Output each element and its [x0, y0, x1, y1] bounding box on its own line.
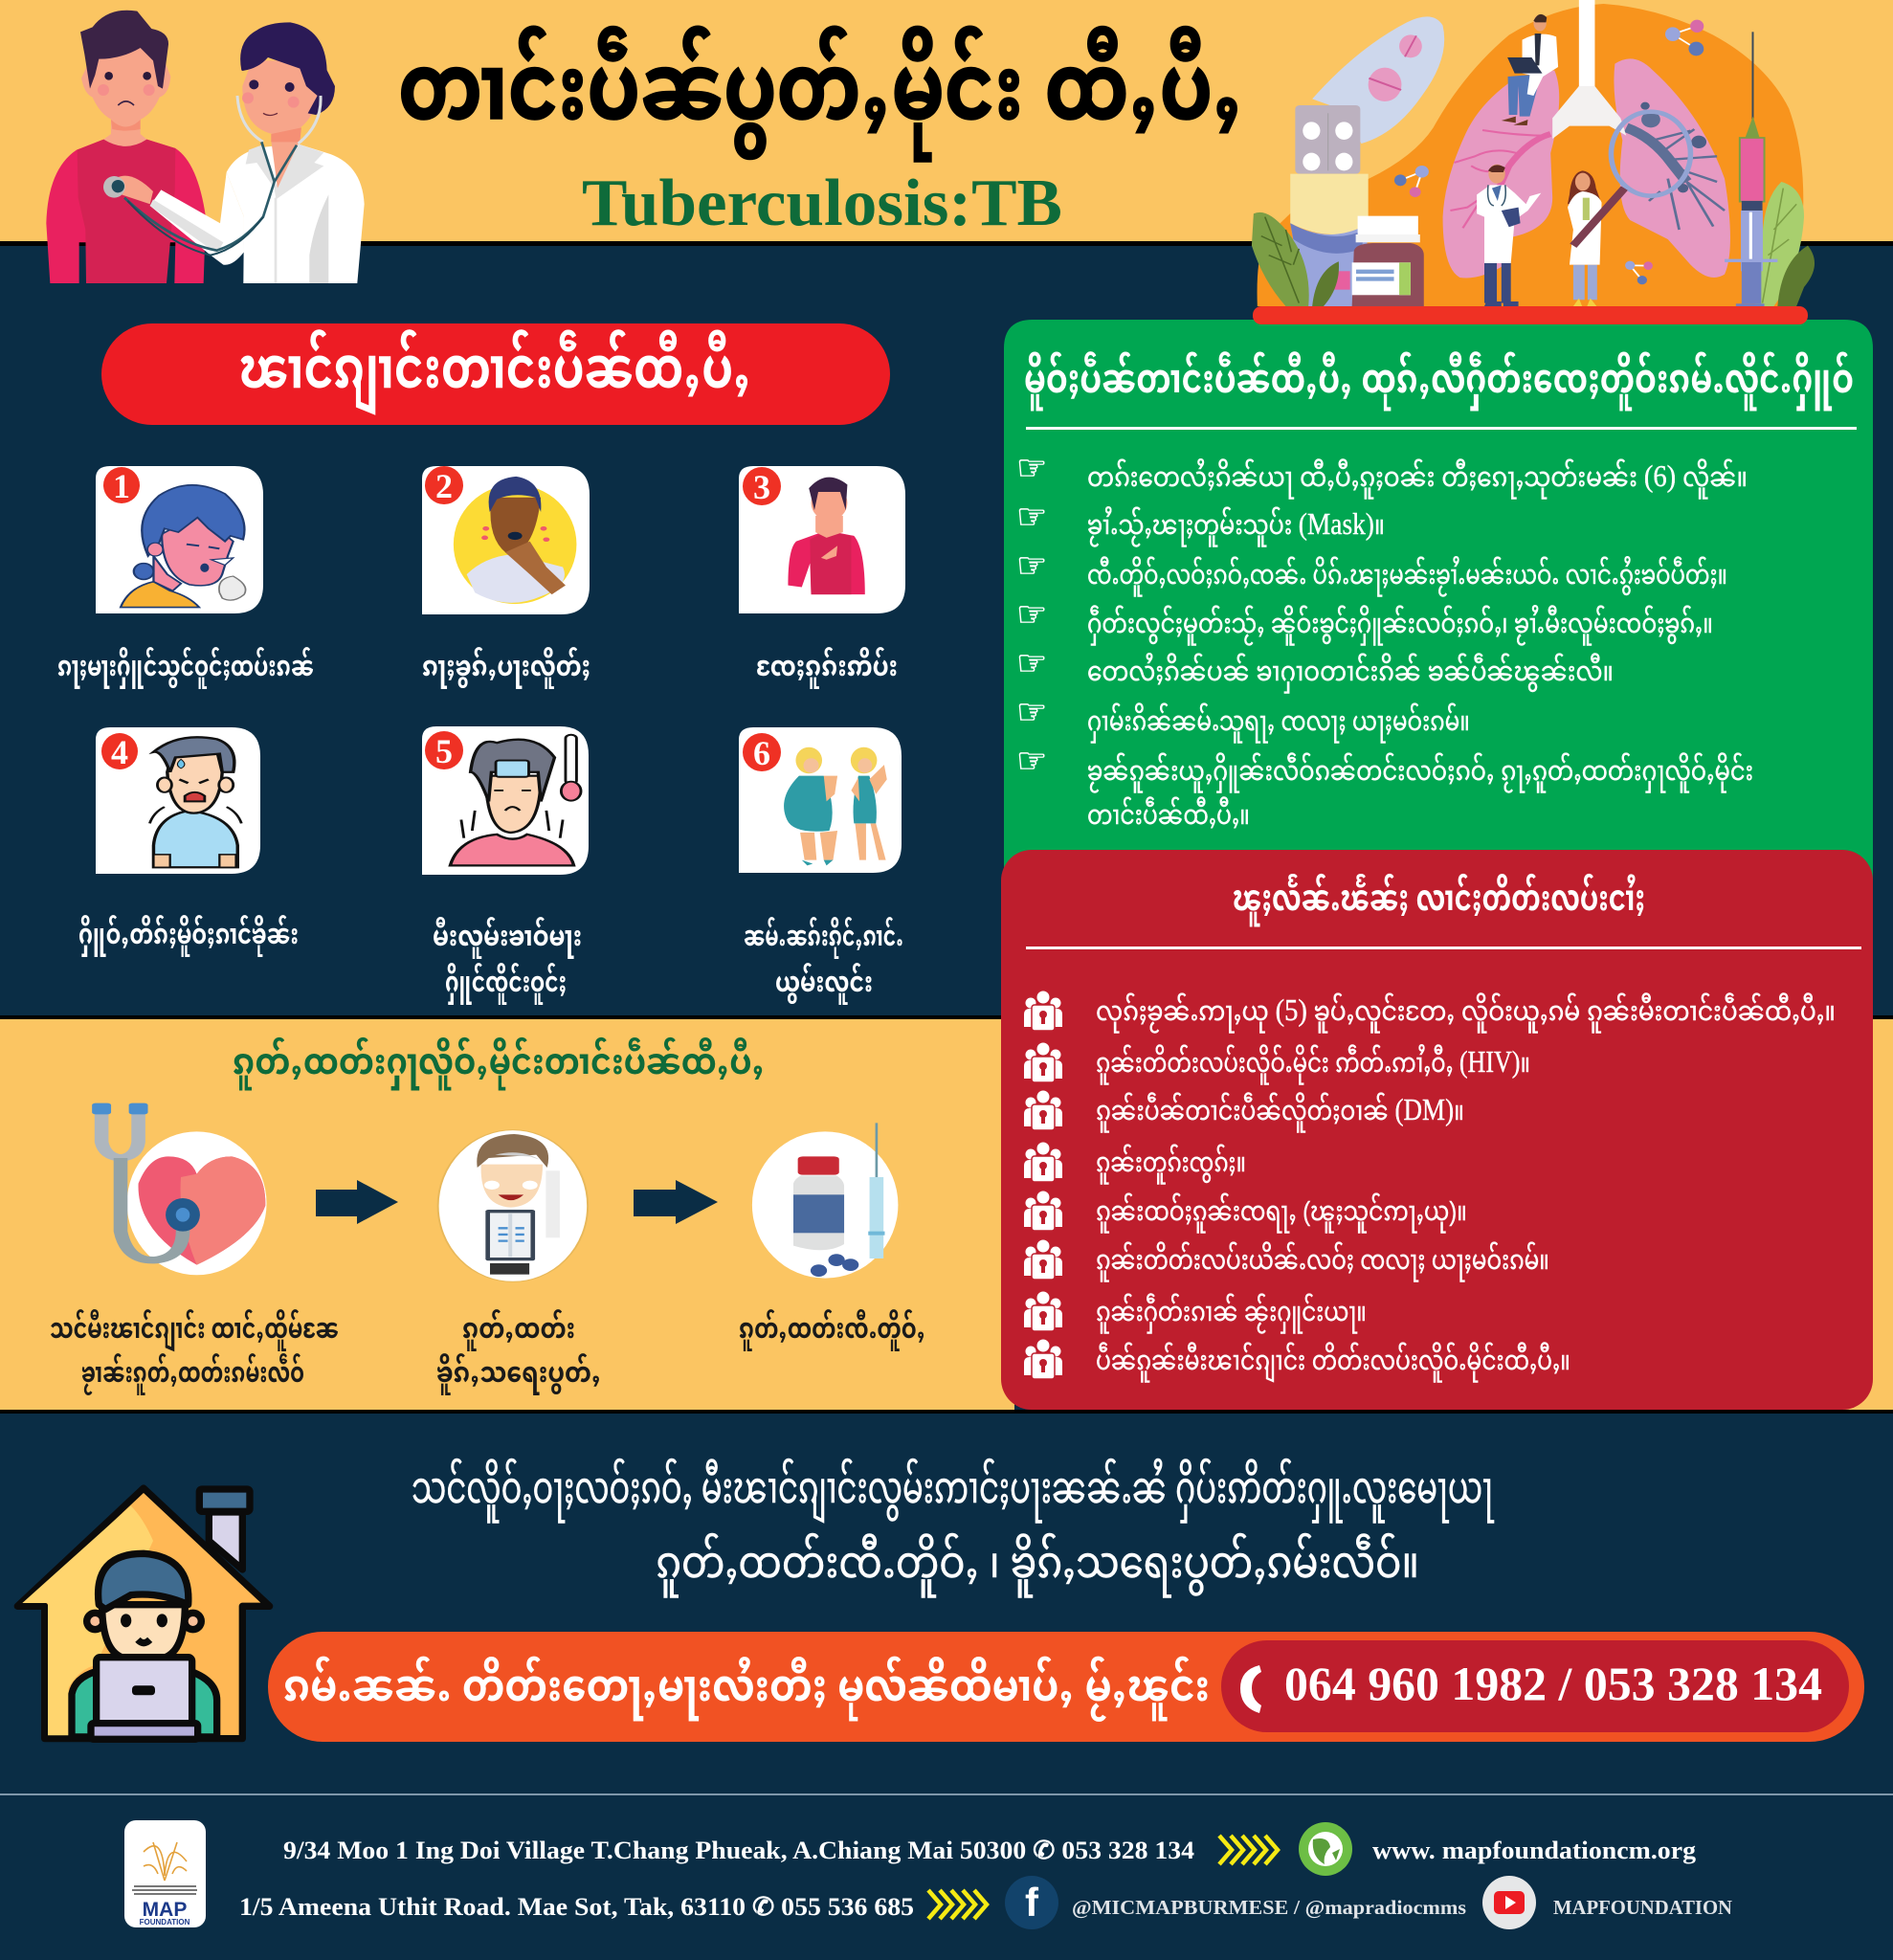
prevention list: တၵ်းတေလႆႈၵိၼ်ယႃ ထီႇပီႇၵူႈဝၼ်း တီႈၵေႃႇသုတ်းမၼ်း (6) လိူၼ်။	[1087, 458, 1748, 499]
facebook handle: @MICMAPBURMESE / @mapradiocmms	[1072, 1896, 1466, 1919]
standing female doctor	[1568, 170, 1602, 308]
symptom card 6: weight loss	[739, 727, 902, 873]
title	[398, 25, 1243, 240]
number badge 2	[425, 466, 463, 505]
icon: house with person at laptop	[17, 1488, 270, 1739]
icon: globe	[1299, 1822, 1352, 1876]
risk list: ၵူၼ်းထဝ်ႈၵူၼ်းၸရႃႇ (ၽူႈသူင်ဢႃႇယု)။	[1096, 1193, 1467, 1233]
prevention list: ႁၢမ်းၵိၼ်ၼမ်ႉသူရႃႇ ၸလႃႈ ယႃႈမဝ်းၵမ်။	[1087, 703, 1470, 743]
chevrons 1	[1219, 1836, 1278, 1864]
symptom card 2: coughing blood	[422, 466, 590, 614]
symptom labels: ႁိူဝ်ႇတိၵ်ႈမိူဝ်ႈၵၢင်ၶိုၼ်း	[78, 914, 299, 957]
step labels: ၵူတ်ႇထတ်း	[462, 1308, 575, 1351]
molecules	[1394, 20, 1704, 284]
number badge 3	[743, 467, 781, 506]
symptom labels: ႁိူင်ၸိူင်းဝူင်ႈ	[445, 962, 567, 1005]
risk heading: ၽူႈလႅၼ်ႉၽႅၼ်ႈ လၢင်ႈတိတ်းလပ်းငၢႆႈ	[1233, 873, 1645, 927]
youtube name: MAPFOUNDATION	[1553, 1896, 1732, 1919]
logo: FOUNDATION	[140, 1918, 190, 1927]
risk list: ၵူၼ်းတိတ်းလပ်းယိၼ်ႉလဝ်ႈ ၸလႃႈ ယႃႈမဝ်းၵမ်။	[1096, 1242, 1549, 1281]
standing male doctor	[1477, 165, 1541, 306]
risk list: ၵူၼ်းတူၵ်းၸွၵ်ႈ။	[1096, 1145, 1246, 1184]
phone number	[1221, 1640, 1849, 1732]
chevrons 2	[928, 1890, 987, 1919]
arrow 1	[316, 1180, 398, 1224]
title: Tuberculosis:TB	[582, 167, 1062, 240]
step labels: သင်မီးၽၢင်ၵျၢင်း ထၢင်ႇထိူမ်ၼႄ	[50, 1308, 339, 1352]
panel: risk groups	[1001, 850, 1873, 1410]
symptom labels: ယွမ်းလူင်း	[775, 962, 873, 1005]
symptom card 3: chest pain	[739, 466, 905, 613]
symptom labels: ၼမ်ႉၼၵ်းၵိုင်ႇၵၢင်ႉ	[744, 916, 903, 959]
risk list: လုၵ်ႈၶႂၼ်ႉဢႃႇယု (5) ၶူပ်ႇလူင်းတႄႇ လိူဝ်းယူႇၵမ် ၵူၼ်းမီးတၢင်းပဵၼ်ထီႇပီႇ။	[1096, 992, 1836, 1033]
symptom card 1: cough	[96, 466, 263, 613]
icon: x-ray	[438, 1130, 588, 1281]
icon: facebook: f	[1025, 1880, 1039, 1925]
advice text: ၵူတ်ႇထတ်းၸီႉတိူဝ်ႇ ၊ ၶိူၵ်ႇသရေးပွတ်ႇၵမ်းလဵဝ်။	[656, 1532, 1419, 1597]
prevention list: ၶႂၢႆႉသႂ်ႇၽႃႈတူမ်းသူပ်း (Mask)။	[1087, 506, 1385, 546]
symptom labels: ၵႃႈၶွၵ်ႇပႃးလိူတ်ႈ	[422, 646, 590, 689]
symptom labels: မီးလူမ်းၶၢဝ်မႃး	[433, 916, 582, 959]
step labels: ၵူတ်ႇထတ်းၸီႉတိူဝ်ႇ	[739, 1308, 925, 1351]
number badge 3: 3	[753, 468, 770, 506]
prevention list: ၶႂၼ်ၵူၼ်းယူႇႁိူၼ်းလဵဝ်ၵၼ်တင်းလဝ်ႈၵဝ်ႇ ၵႂႃႇၵူတ်ႇထတ်းႁႃလိူဝ်ႇမိုင်း	[1087, 753, 1753, 792]
sitting doctor	[1502, 14, 1558, 125]
step labels: ၶိူၵ်ႇသရေးပွတ်ႇ	[436, 1352, 601, 1395]
risk icons	[1024, 991, 1062, 1379]
icon: facebook	[1005, 1876, 1058, 1929]
risk list: ပဵၼ်ၵူၼ်းမီးၽၢင်ၵျၢင်း တိတ်းလပ်းလိူဝ်ႉမိုင်းထီႇပီႇ။	[1096, 1343, 1570, 1382]
symptom labels	[57, 646, 903, 1005]
arrow 2	[634, 1180, 718, 1224]
symptom card 4: sweating	[96, 727, 260, 874]
risk list: ၵူၼ်းပဵၼ်တၢင်းပဵၼ်လိူတ်ႈဝၢၼ် (DM)။	[1096, 1092, 1464, 1132]
prevention list: ႁဵတ်းလွင်ႈမူတ်းသႂ်ႇ ၼိူဝ်းၶွင်ႈႁိူၼ်းလဝ်ႈၵဝ်ႇ၊ ၶႂၢႆႉမီးလူမ်းၸဝ်ႈၶွၵ်ႇ။	[1087, 606, 1713, 645]
phone number: 064 960 1982 / 053 328 134	[1284, 1657, 1822, 1710]
symptom card 5: fever	[422, 726, 589, 875]
contact pill	[268, 1632, 1864, 1742]
risk list: ၵူၼ်းႁဵတ်းၵၢၼ် ၼႂ်းႁူင်းယႃ။	[1096, 1294, 1367, 1333]
logo	[124, 1820, 206, 1927]
footer address line 1: 9/34 Moo 1 Ing Doi Village T.Chang Phueak, A.Chiang Mai 50300 ✆ 053 328 134	[283, 1837, 1194, 1864]
symptom labels: ၸႄႈၵူၵ်းဢိပ်း	[756, 646, 898, 689]
panel: prevention	[1004, 320, 1873, 880]
contact pill: ၵမ်ႉၼၼ်ႉ တိတ်းတေႃႇမႃးလႆးတီႈ မုလ်ၼိထိမၢပ်ႇ မႂ်ႇၽူင်း	[283, 1655, 1210, 1722]
icon: stethoscope and heart	[92, 1103, 267, 1275]
prevention list: တၢင်းပဵၼ်ထီႇပီႇ။	[1087, 797, 1250, 830]
website: www. mapfoundationcm.org	[1372, 1837, 1696, 1864]
prevention list	[1087, 458, 1753, 830]
header band	[0, 0, 1893, 246]
risk list: ၵူၼ်းတိတ်းလပ်းလိူဝ်ႉမိုင်း ဢဵတ်ႉဢၢႆႇဝီႇ (HIV)။	[1096, 1044, 1530, 1084]
diagnosis heading: ၵူတ်ႇထတ်းႁႃလိူဝ်ႇမိုင်းတၢင်းပဵၼ်ထီႇပီႇ	[233, 1036, 765, 1091]
icon: medicine	[752, 1123, 898, 1279]
number badge 2: 2	[435, 467, 453, 505]
step labels	[50, 1308, 925, 1396]
prevention list: တေလႆႈၵိၼ်ပၼ် ၶၢႁၢဝတၢင်းၵိၼ် ၶၼ်ပဵၼ်ၽွၼ်းလီ။	[1087, 654, 1614, 693]
number badge 6	[743, 733, 781, 772]
advice text	[412, 1458, 1495, 1597]
footer divider	[0, 1793, 1893, 1795]
prevention list: ၸီႉတိူဝ်ႇလဝ်ႈၵဝ်ႇၸၼ်ႉ ပိၵ်ႉၽႃႈမၼ်းၶႂၢႆႉမၼ်းယဝ်ႉ လၢင်ႉၵွႆးၶဝ်ပဵတ်ႈ။	[1087, 557, 1727, 596]
symptoms heading pill	[101, 323, 890, 425]
icon: youtube	[1482, 1876, 1536, 1929]
title: တၢင်းပဵၼ်ပွတ်ႇမိုင်း ထီႇပီႇ	[398, 25, 1243, 162]
number badge 5: 5	[435, 732, 453, 770]
symptoms heading pill: ၽၢင်ၵျၢင်းတၢင်းပဵၼ်ထီႇပီႇ	[239, 330, 751, 415]
number badge 4	[101, 733, 138, 771]
panel: diagnosis band	[0, 1015, 1893, 1414]
icon: patient and doctor	[46, 11, 365, 283]
number badge 4: 4	[111, 733, 128, 771]
footer address line 2: 1/5 Ameena Uthit Road. Mae Sot, Tak, 63110 ✆ 055 536 685	[239, 1893, 914, 1921]
risk list	[1096, 992, 1836, 1382]
step labels: ၶႂၢၼ်းၵူတ်ႇထတ်းၵမ်းလဵဝ်	[81, 1352, 304, 1396]
symptom labels: ၵႃႈမႃးႁိူင်သွင်ဝူင်ႈထပ်းၵၼ်	[57, 646, 314, 689]
number badge 5	[425, 731, 463, 770]
number badge 6: 6	[753, 734, 770, 772]
number badge 1: 1	[113, 467, 130, 505]
logo: MAP	[143, 1899, 187, 1921]
number badge 1	[103, 467, 140, 505]
prevention bullets	[1016, 449, 1047, 781]
icon: lungs illustration	[1252, 0, 1815, 308]
base bar	[1253, 306, 1808, 324]
